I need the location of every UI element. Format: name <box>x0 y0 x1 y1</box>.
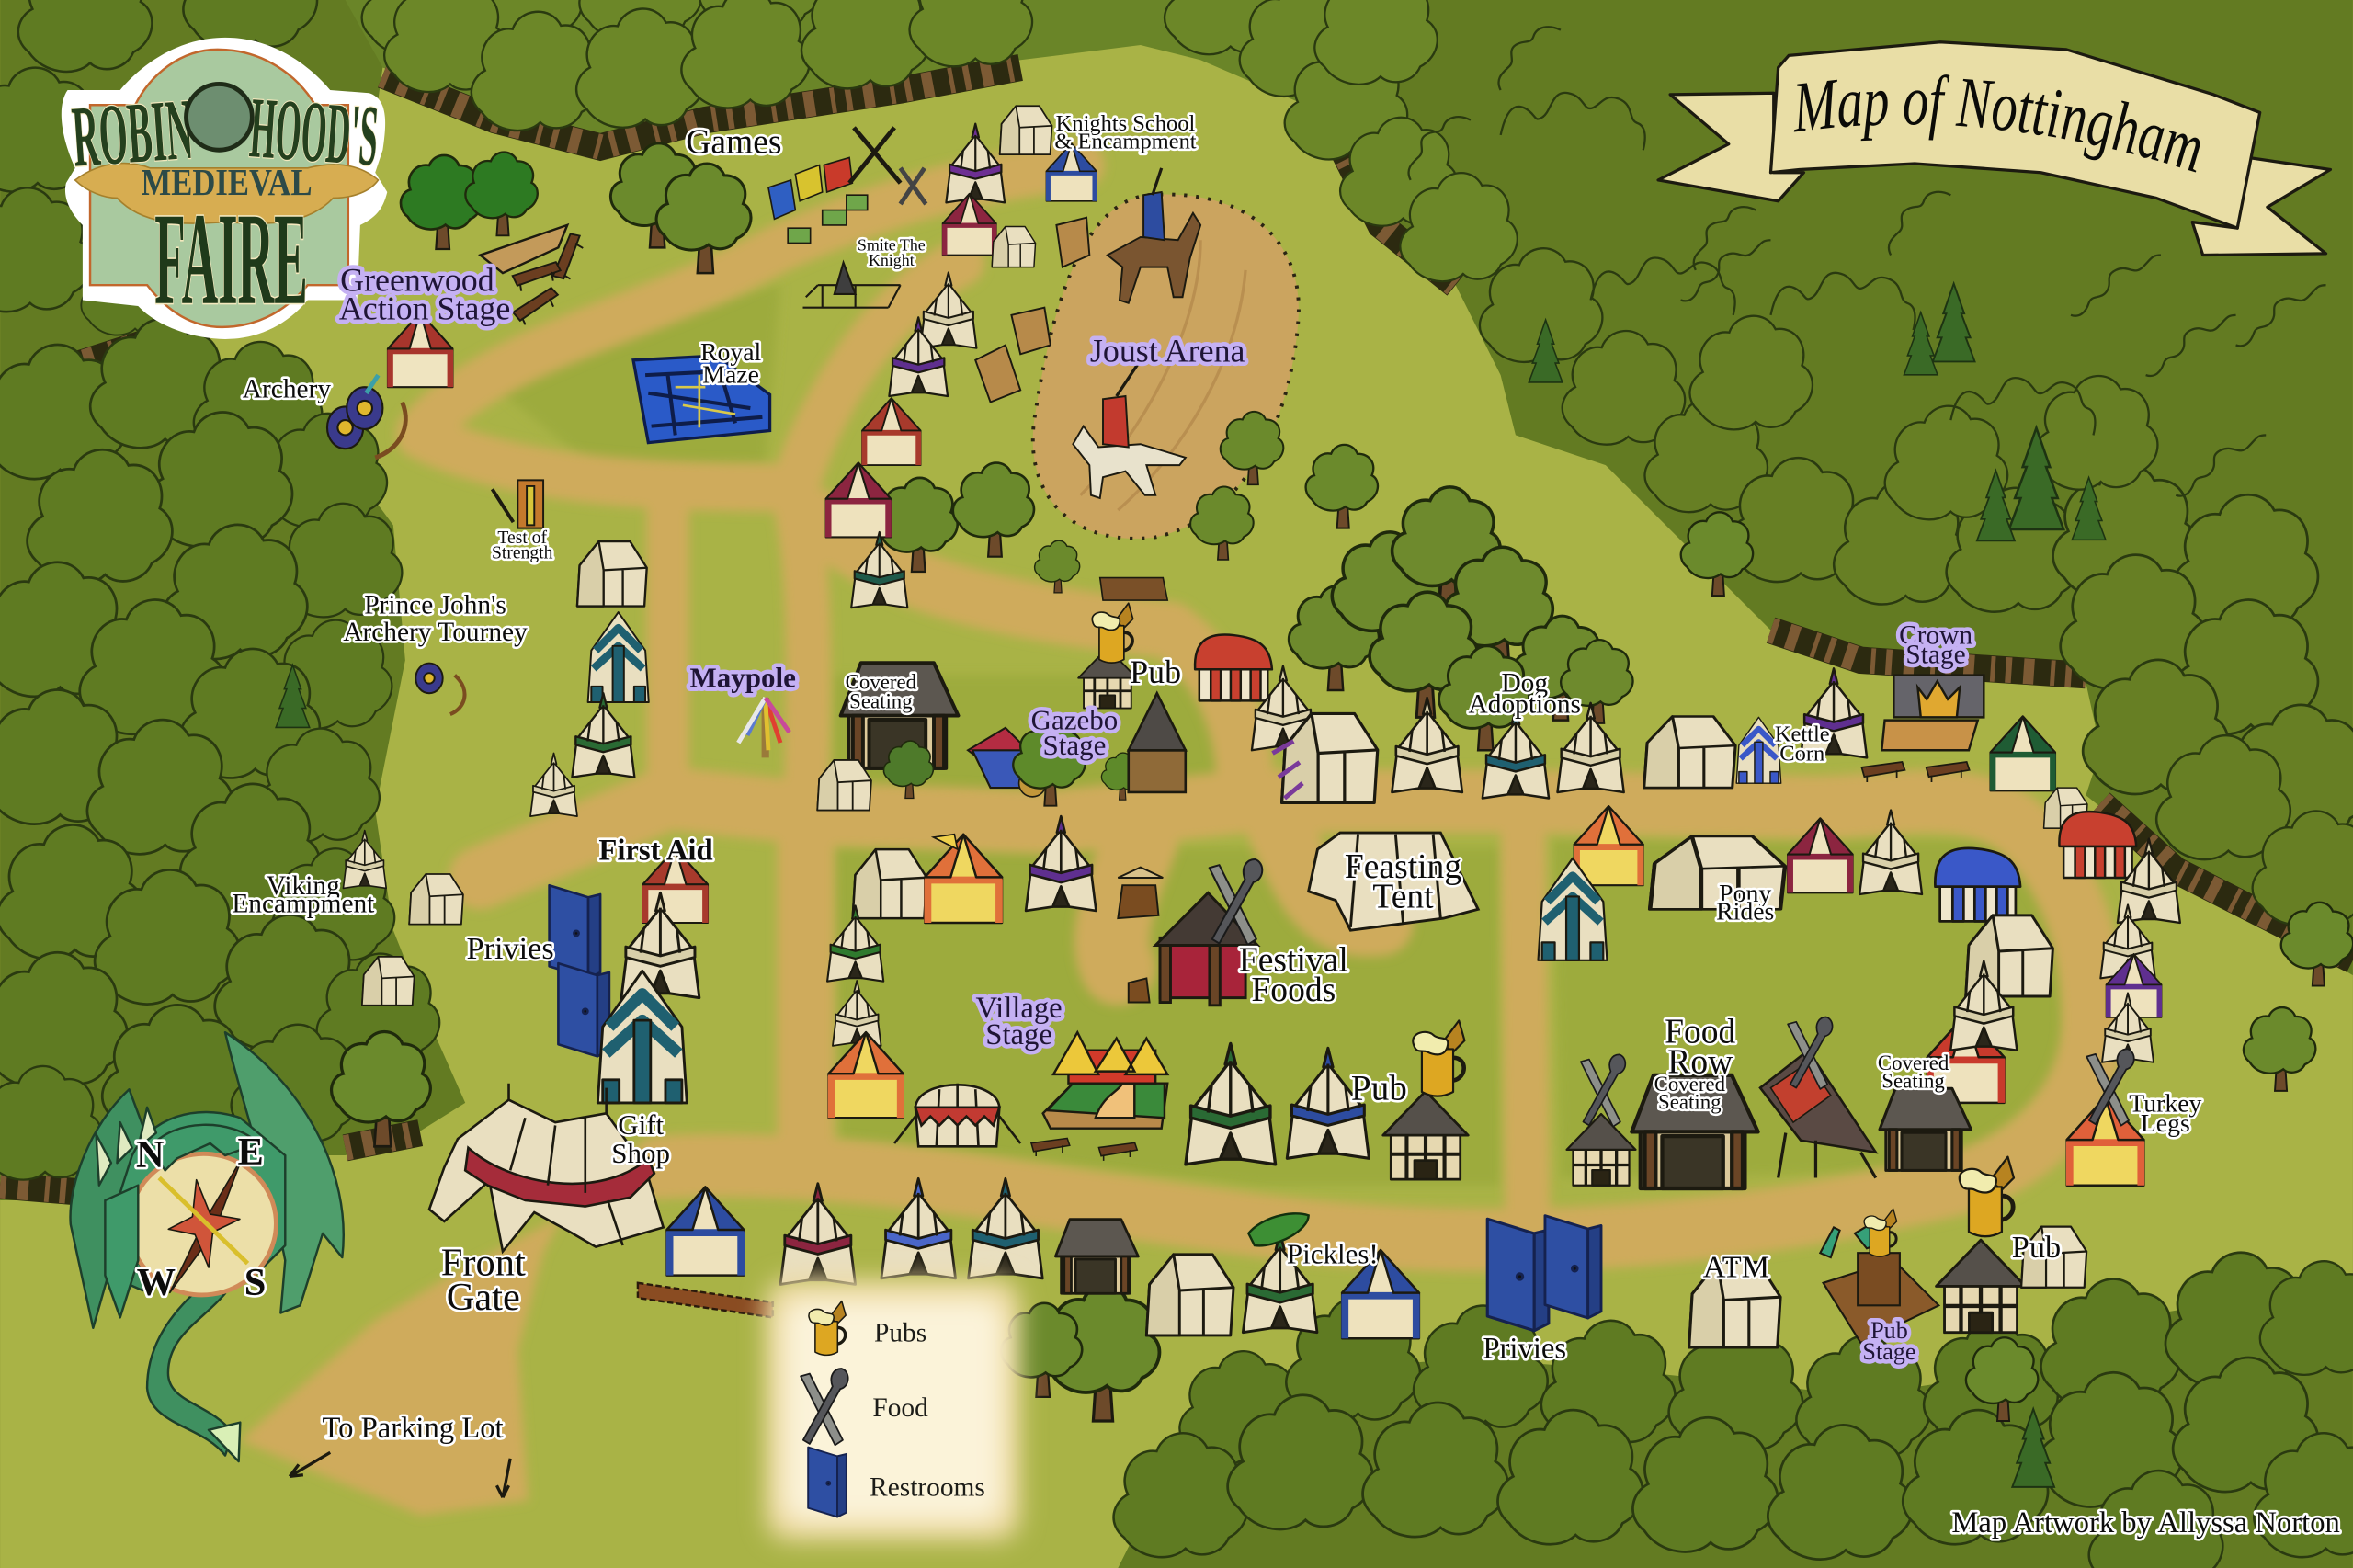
forest wiggle lines <box>1409 27 2326 496</box>
label: Smite The Knight: Knight <box>869 251 915 269</box>
scattered trees <box>332 143 2353 1421</box>
archery targets <box>327 375 405 458</box>
label: Turkey Legs: Turkey <box>2129 1090 2201 1119</box>
logo: Robin Hood's Medieval Faire: ROBIN <box>69 82 196 186</box>
label: Smite The Knight: Smite The <box>858 236 926 255</box>
pub stage barrel and music notes <box>1820 1209 1938 1343</box>
label: Feasting Tent: Feasting <box>1345 848 1461 886</box>
label: Pub: Pub <box>2012 1230 2061 1265</box>
label: Gift Shop: Gift <box>618 1108 664 1141</box>
label: Test of Strength: Test of <box>497 528 547 548</box>
compass letters <box>136 1131 266 1304</box>
maypole <box>738 698 790 757</box>
eastern upper tents <box>1990 716 2180 1062</box>
village stage <box>1031 1032 1167 1161</box>
label: Prince John's Archery Tourney: Archery Tourney <box>343 618 528 647</box>
label: Covered Seating: Covered <box>846 670 916 693</box>
label: Pub: Pub <box>1130 653 1181 690</box>
knight bottom with horse <box>1073 360 1186 498</box>
label: Knights School and Encampment: Knights School <box>1056 111 1195 136</box>
food row buildings <box>1567 1017 1971 1188</box>
logo: Robin Hood's Medieval Faire: MEDIEVAL <box>142 162 313 203</box>
label: Dog Adoptions: Dog <box>1501 669 1548 699</box>
central block: covered seating, wagon, gazebo <box>817 663 1186 811</box>
dragon body <box>108 1112 285 1276</box>
dragon spikes <box>97 1108 156 1186</box>
large privies <box>1487 1216 1601 1331</box>
label: Privies: Privies <box>467 931 554 966</box>
label: Covered Seating: Seating <box>1881 1070 1945 1093</box>
label: Test of Strength: Strength <box>492 543 553 562</box>
second archery target <box>415 664 465 714</box>
front gate road <box>240 1215 563 1516</box>
label: Covered Seating: Covered <box>1654 1073 1725 1096</box>
label: Covered Seating: Covered <box>1878 1051 1949 1074</box>
forest canopy: bottom right <box>1114 1253 2353 1568</box>
legend: restrooms <box>808 1448 985 1517</box>
label: Kettle Corn: Kettle <box>1775 722 1830 746</box>
label: Greenwood Action Stage: Greenwood <box>340 262 494 299</box>
joust arena ground <box>1033 194 1299 539</box>
privies and first aid tents <box>550 848 708 1103</box>
legend panel <box>766 1278 1020 1541</box>
legend: pubs <box>809 1301 926 1355</box>
legend: restrooms: Restrooms <box>870 1473 985 1503</box>
label: Joust Arena: Joust Arena <box>1090 332 1245 369</box>
compass letters: N <box>136 1133 165 1176</box>
parking lot arrows <box>290 1452 510 1497</box>
logo: Robin Hood's Medieval Faire: FAIRE <box>154 187 308 333</box>
smite the knight pen <box>802 263 901 308</box>
forest canopy: left <box>0 319 439 1180</box>
compass dragon <box>71 1032 344 1461</box>
text: HOOD'S <box>247 80 381 185</box>
food row interior tents <box>1539 806 2052 1103</box>
label: Viking Encampment: Encampment <box>232 890 374 919</box>
label: Turkey Legs: Legs <box>2141 1109 2190 1138</box>
label: Gift Shop: Shop <box>611 1137 670 1169</box>
west tents <box>343 541 649 1006</box>
pickle <box>1248 1213 1309 1245</box>
label: Food Row: Row <box>1667 1043 1733 1081</box>
label: Food Row: Food <box>1665 1014 1735 1051</box>
forest canopy: right <box>1480 248 2353 925</box>
logo: Robin Hood's Medieval Faire <box>62 38 387 339</box>
label: Pickles!: Pickles! <box>1287 1238 1379 1270</box>
label: Front Gate: Gate <box>447 1276 520 1319</box>
compass letters: E <box>238 1131 264 1174</box>
dragon left wing <box>71 1089 165 1328</box>
jousting benches <box>975 218 1089 403</box>
forest tree line trunks <box>0 67 2353 1193</box>
label: Gazebo Stage: Gazebo <box>1031 703 1118 735</box>
label: Gazebo Stage: Stage <box>1043 729 1106 761</box>
label: Pub Stage: Pub <box>1870 1317 1908 1344</box>
greenwood action stage trees and platform <box>401 153 591 327</box>
turkey legs stand <box>2067 1049 2143 1186</box>
label: Royal Maze: Maze <box>702 360 759 389</box>
label: Kettle Corn: Corn <box>1779 742 1824 767</box>
label: Knights School and Encampment: & Encampment <box>1054 130 1197 154</box>
label: Village Stage: Village <box>976 992 1063 1025</box>
label: Games: Games <box>686 124 782 162</box>
label: Privies: Privies <box>1483 1332 1566 1365</box>
label: Pub: Pub <box>1351 1069 1407 1108</box>
label: Covered Seating: Seating <box>849 690 913 713</box>
pine trees <box>276 284 2106 1487</box>
ATM tent <box>1689 1262 1780 1347</box>
label: Covered Seating: Seating <box>1658 1090 1722 1113</box>
legend: food: Food <box>872 1393 928 1423</box>
knight top with horse <box>1108 168 1200 303</box>
dragon foreleg over compass <box>150 1125 258 1170</box>
compass face <box>120 1144 285 1304</box>
label: To Parking Lot: To Parking Lot <box>322 1412 504 1445</box>
label: Front Gate: Front <box>441 1242 526 1285</box>
label: Festival Foods: Festival <box>1239 941 1348 979</box>
label: First Aid: First Aid <box>598 834 713 867</box>
central tree cluster <box>1289 487 1633 750</box>
title banner: Map of Nottingham: Map of Nottingham <box>1794 74 2200 173</box>
label: Dog Adoptions: Adoptions <box>1469 689 1581 719</box>
upper pub <box>1078 603 1137 709</box>
dirt paths <box>420 165 2093 1240</box>
fence <box>638 1283 773 1317</box>
legend: pubs: Pubs <box>874 1318 926 1347</box>
pub house south <box>1937 1157 2086 1333</box>
label: Pony Rides: Rides <box>1716 898 1774 926</box>
compass arrow <box>159 1178 247 1264</box>
feasting tent <box>1309 833 1478 930</box>
artist credit: Map Artwork by Allyssa Norton <box>1951 1506 2340 1540</box>
label: ATM: ATM <box>1703 1249 1769 1284</box>
game booths <box>768 128 926 243</box>
compass letters: W <box>137 1261 176 1304</box>
darker lawn patches <box>481 285 2071 1186</box>
title banner: Map of Nottingham <box>1656 40 2333 257</box>
label: Prince John's Archery Tourney: Prince John's <box>364 591 506 620</box>
label: Greenwood Action Stage: Action Stage <box>339 290 510 327</box>
royal maze <box>633 356 770 443</box>
central interior tents <box>827 816 1096 1146</box>
gift shop big tent <box>429 1084 664 1252</box>
label: Viking Encampment: Viking <box>267 871 340 901</box>
dragon head <box>105 1186 138 1317</box>
legend: food <box>801 1369 928 1445</box>
label: Crown Stage: Crown <box>1899 620 1972 650</box>
bottom row tents <box>667 1178 1419 1338</box>
north lane tents <box>826 106 1097 608</box>
forest canopy: top <box>362 0 1518 281</box>
crown stage <box>1861 676 1984 782</box>
label: Pub Stage: Stage <box>1862 1338 1915 1365</box>
label: Festival Foods: Foods <box>1251 971 1336 1009</box>
greenwood red tent <box>388 312 452 387</box>
test of strength icon <box>493 480 543 528</box>
label: Archery: Archery <box>243 375 331 404</box>
label: Royal Maze: Royal <box>700 338 761 367</box>
label: Maypole: Maypole <box>690 662 796 694</box>
lower interior tents <box>1186 1020 1468 1179</box>
label: Pony Rides: Pony <box>1719 880 1771 908</box>
label: Village Stage: Stage <box>985 1018 1052 1051</box>
dragon right wing <box>225 1032 344 1312</box>
upper row tents <box>1195 634 1867 802</box>
compass letters: S <box>244 1261 266 1304</box>
wood cart <box>1100 578 1167 600</box>
dragon tail <box>147 1293 233 1456</box>
festival foods booth <box>1155 859 1262 1006</box>
label: Crown Stage: Stage <box>1905 641 1966 670</box>
festival sign and cafe table <box>1118 868 1163 1003</box>
forest canopy: top left <box>0 0 317 335</box>
top forest lighter tone <box>346 0 1350 165</box>
label: Feasting Tent: Tent <box>1372 879 1434 916</box>
